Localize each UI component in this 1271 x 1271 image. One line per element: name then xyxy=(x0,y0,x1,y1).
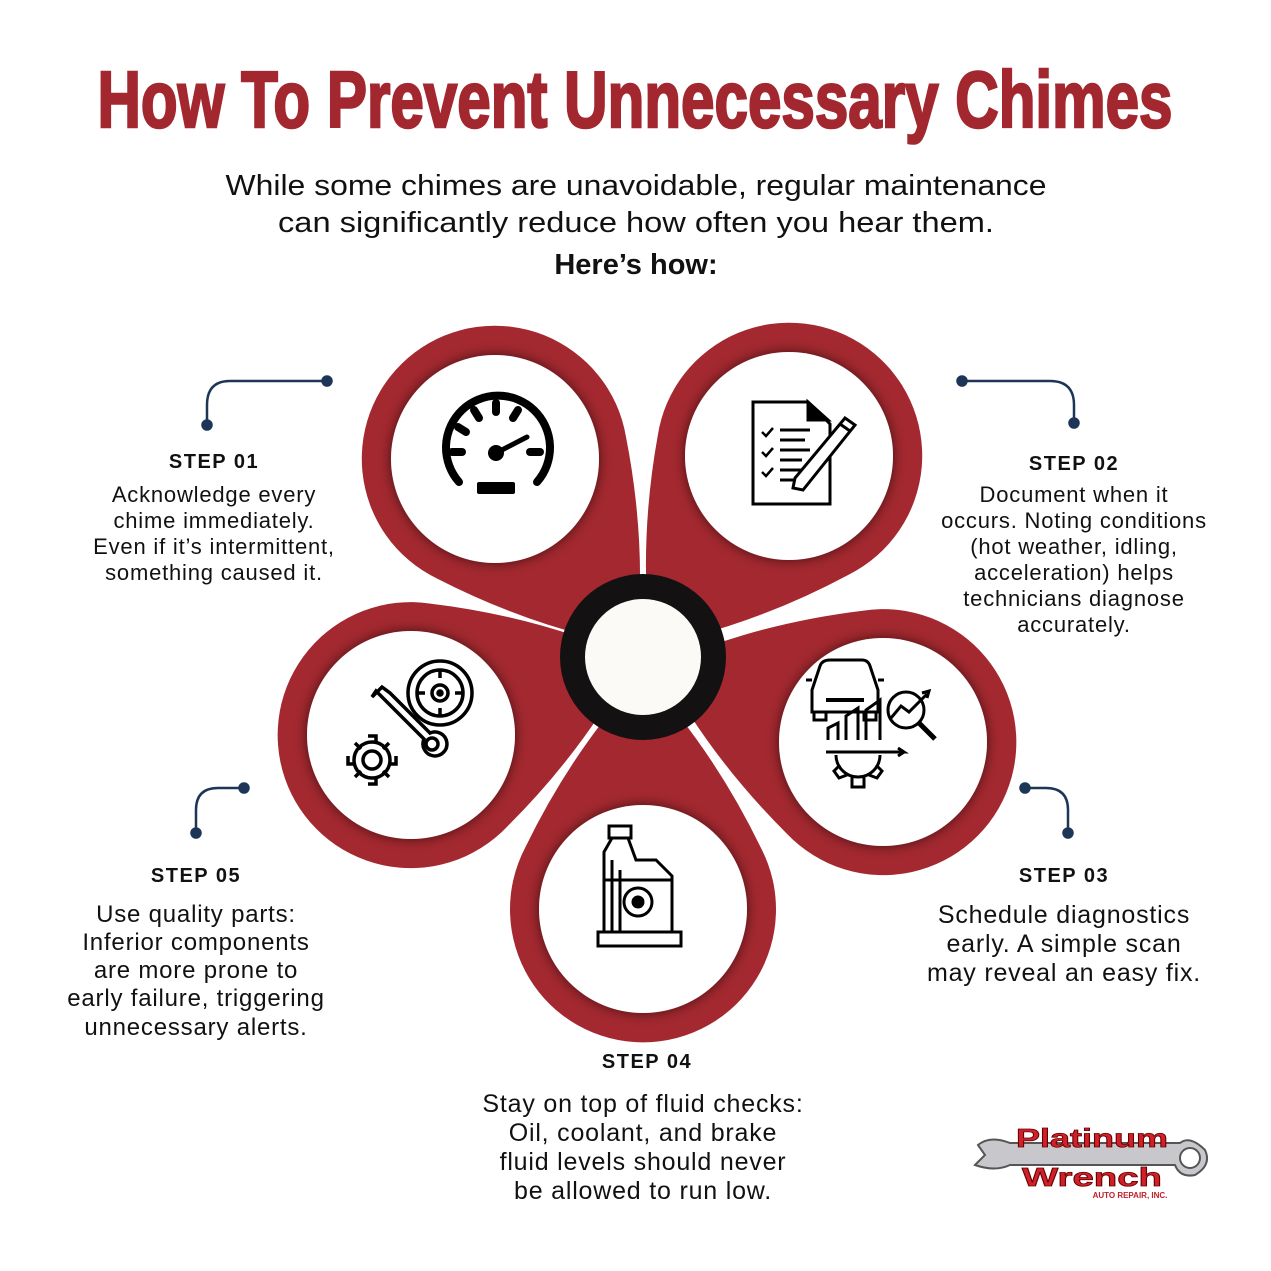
logo: Platinum Wrench: Wrench xyxy=(1022,1162,1162,1192)
text: step 01: Even if it’s intermittent, xyxy=(93,534,335,559)
text: step 03: STEP 03 xyxy=(1019,865,1109,887)
logo: Platinum Wrench xyxy=(975,1123,1207,1200)
flower diagram xyxy=(242,270,1052,1042)
text: step 04: Oil, coolant, and brake xyxy=(509,1119,777,1147)
text: step 05: unnecessary alerts. xyxy=(84,1014,308,1041)
connector: step 01 xyxy=(202,376,332,430)
petal: step 04 xyxy=(510,674,776,1042)
text: step 04 xyxy=(482,1051,804,1205)
petal: step 01 xyxy=(309,272,743,727)
icon: checklist document with pen xyxy=(753,402,855,504)
text: step 01: something caused it. xyxy=(105,560,323,585)
text: step 02: occurs. Noting conditions xyxy=(941,508,1207,533)
connector: step 05 xyxy=(192,784,248,838)
text: step 02: accurately. xyxy=(1017,612,1131,637)
text: step 02: STEP 02 xyxy=(1029,453,1119,475)
text: step 05: STEP 05 xyxy=(151,865,241,887)
text: step 03: early. A simple scan xyxy=(946,930,1182,958)
petal: step 05 xyxy=(242,533,676,904)
icon: gears and wrench xyxy=(348,661,472,784)
connector: step 02 xyxy=(958,376,1078,428)
logo: Platinum Wrench: Platinum xyxy=(1016,1123,1168,1153)
text: step 01: chime immediately. xyxy=(113,508,315,533)
petal: step 02 xyxy=(543,270,975,724)
white circles xyxy=(307,352,987,1013)
icon: oil jug xyxy=(598,826,681,946)
text: step 05: Inferior components xyxy=(82,929,310,956)
subtitle xyxy=(226,170,1046,281)
text: step 04: Stay on top of fluid checks: xyxy=(482,1090,804,1118)
text: step 02: technicians diagnose xyxy=(963,586,1185,611)
text: step 03 xyxy=(927,865,1201,987)
logo: Platinum Wrench: AUTO REPAIR, INC. xyxy=(1093,1191,1167,1200)
text: step 04: STEP 04 xyxy=(602,1051,692,1073)
text: step 02 xyxy=(941,453,1207,637)
text: step 05: are more prone to xyxy=(94,957,298,984)
text: step 04: be allowed to run low. xyxy=(514,1177,772,1205)
subtitle: While some chimes are unavoidable, regular maintenance xyxy=(226,170,1046,202)
text: step 05: early failure, triggering xyxy=(67,985,325,1012)
text: step 01: STEP 01 xyxy=(169,451,259,473)
text: step 02: Document when it xyxy=(980,482,1168,507)
text: step 02: (hot weather, idling, xyxy=(970,534,1178,559)
text: step 05 xyxy=(67,865,325,1041)
text: step 02: acceleration) helps xyxy=(974,560,1174,585)
text: step 05: Use quality parts: xyxy=(96,901,296,928)
text: step 01 xyxy=(93,451,335,585)
text: step 03: Schedule diagnostics xyxy=(938,901,1190,929)
text: step 04: fluid levels should never xyxy=(500,1148,786,1176)
text: step 03: may reveal an easy fix. xyxy=(927,959,1201,987)
text: step 01: Acknowledge every xyxy=(112,482,316,507)
petal: step 03 xyxy=(618,540,1052,911)
icon: car with analytics xyxy=(806,660,935,787)
icon: speedometer xyxy=(446,396,550,494)
connector: step 03 xyxy=(1020,784,1072,838)
subtitle: Here’s how: xyxy=(554,249,718,281)
hub xyxy=(560,574,726,740)
subtitle: can significantly reduce how often you hear them. xyxy=(278,207,994,239)
